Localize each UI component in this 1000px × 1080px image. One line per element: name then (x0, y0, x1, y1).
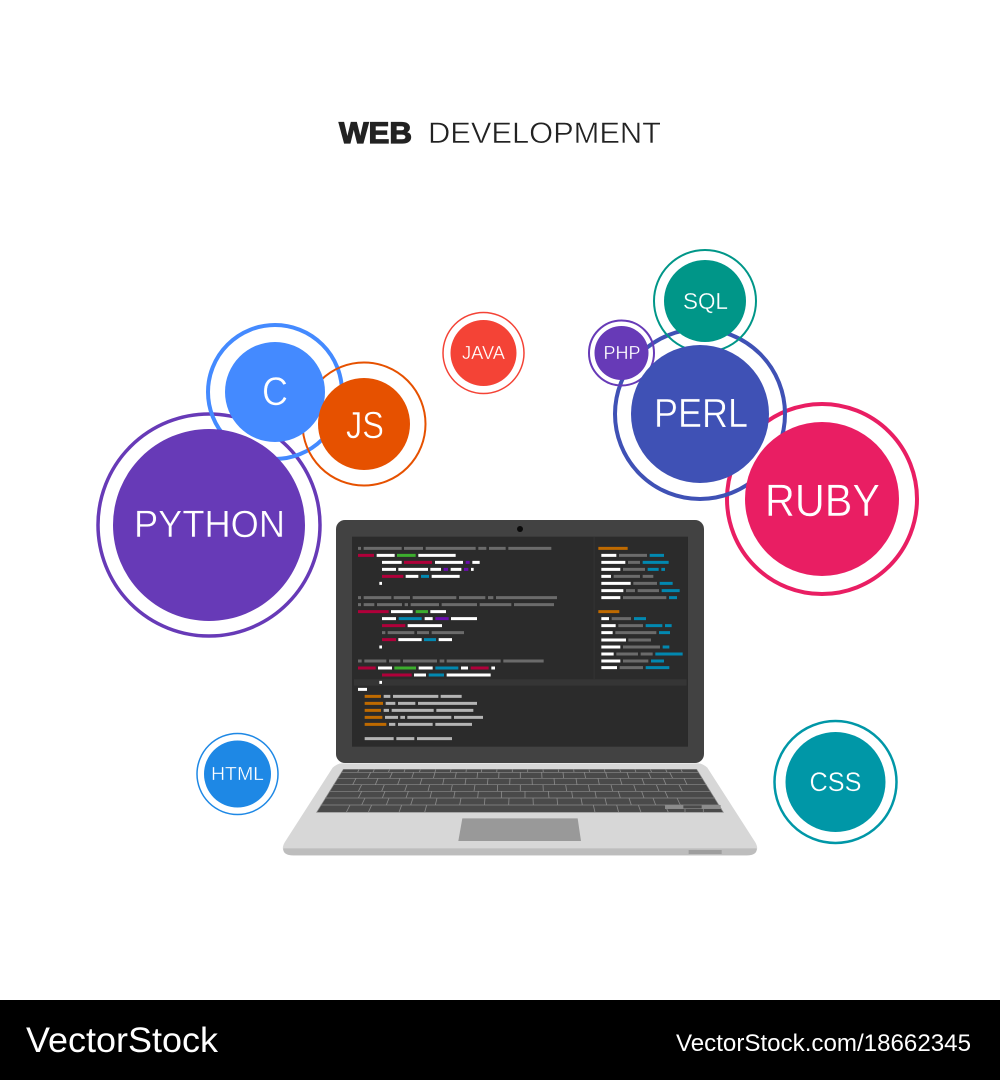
ring: Python (98, 414, 320, 636)
main code lines (358, 548, 557, 689)
badge: Perl: PERL (654, 390, 748, 436)
watermark bar: VectorStock.com/18662345 (676, 1030, 971, 1057)
terminal lines (365, 696, 483, 739)
badge: Ruby: RUBY (765, 475, 880, 526)
side panel code lines (598, 548, 683, 668)
badge: Java: JAVA (462, 343, 505, 363)
badge: PHP: PHP (604, 343, 640, 363)
badge: JS: JS (346, 405, 384, 447)
badge: SQL: SQL (683, 288, 728, 314)
trackpad (458, 818, 581, 841)
ring: C (208, 325, 342, 459)
laptop (283, 520, 757, 855)
badge: SQL (664, 260, 746, 342)
badge: Ruby (745, 422, 899, 576)
badge: Java (443, 312, 524, 394)
code editor screen (352, 537, 688, 747)
laptop screen bezel (336, 520, 704, 763)
badge: Perl (631, 345, 769, 483)
ring: PHP (589, 320, 654, 386)
laptop base (283, 763, 757, 855)
badge: PHP (594, 326, 648, 380)
badge: CSS (774, 721, 896, 843)
watermark bar (0, 1000, 1000, 1080)
ring: SQL (654, 250, 756, 352)
badge: Python (113, 429, 305, 621)
title: DEVELOPMENT (428, 117, 661, 150)
badge: C: C (262, 370, 288, 414)
port (689, 850, 722, 854)
ring: JS (302, 362, 426, 486)
keyboard (317, 769, 723, 812)
watermark bar: VectorStock (26, 1021, 219, 1060)
badge: JS (318, 378, 410, 470)
webcam (517, 526, 523, 532)
ring: Ruby (727, 404, 917, 594)
badge: Python: PYTHON (134, 504, 285, 546)
ring: Perl (615, 329, 785, 499)
badge: HTML (197, 734, 278, 814)
badge: HTML: HTML (211, 764, 264, 784)
title: WEB (339, 117, 412, 150)
badge: CSS: CSS (810, 767, 862, 797)
badge: C (225, 342, 325, 442)
